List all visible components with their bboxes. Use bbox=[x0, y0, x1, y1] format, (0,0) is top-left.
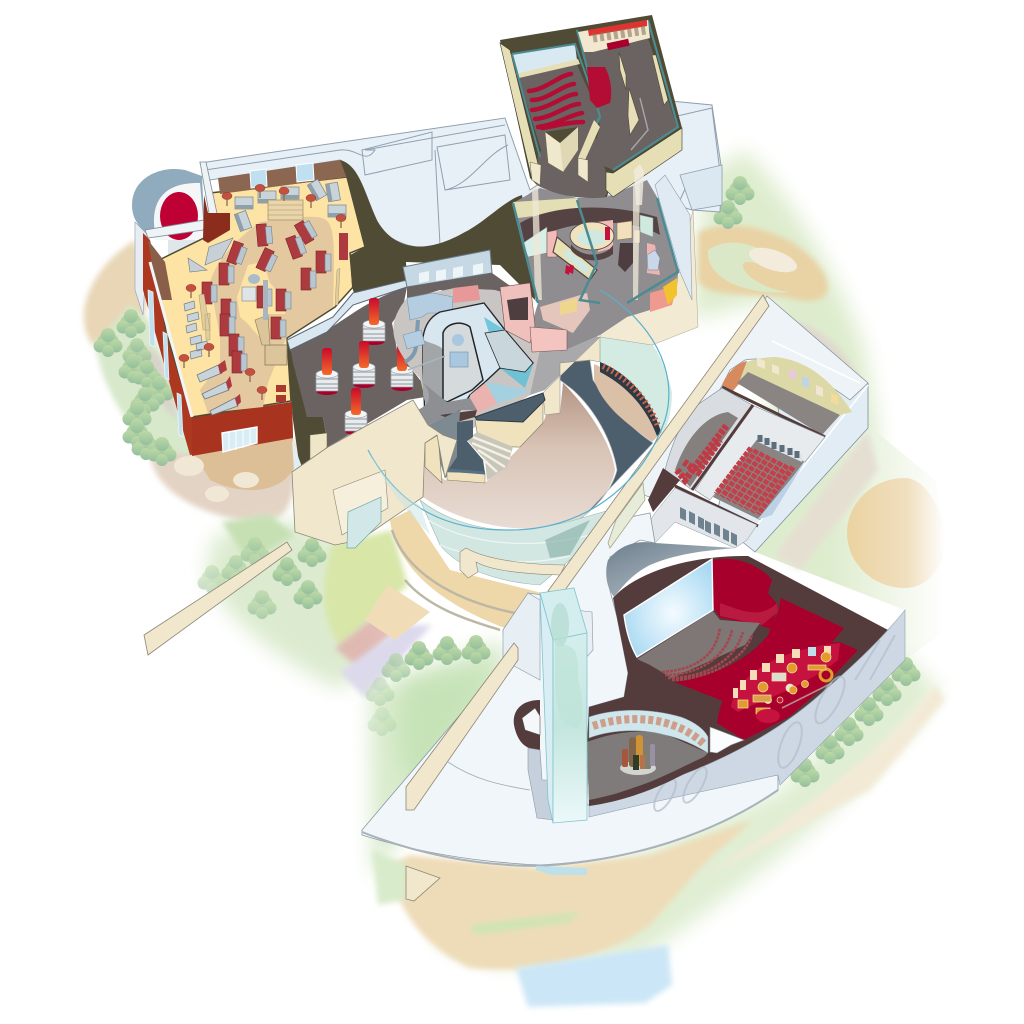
floor slab bbox=[500, 15, 682, 198]
beige outer wall bbox=[600, 210, 698, 345]
right theatres bbox=[625, 296, 868, 552]
support column bbox=[406, 866, 440, 901]
dark curved lobby niche bbox=[514, 700, 540, 750]
left side windows bbox=[148, 290, 183, 437]
glass perimeter wall bbox=[589, 610, 905, 817]
atrium slate walkway bbox=[560, 360, 653, 523]
curved rooms bbox=[523, 227, 547, 257]
front walls bbox=[606, 128, 682, 197]
wall of portraits bbox=[594, 362, 662, 442]
room one bbox=[665, 388, 752, 490]
olive structural slab bbox=[340, 160, 538, 303]
lipstick displays bbox=[316, 298, 413, 435]
left hall floor bbox=[155, 177, 365, 417]
light shafts bbox=[532, 170, 640, 300]
beige column bbox=[543, 337, 600, 415]
bottle display bbox=[620, 735, 656, 775]
white block bbox=[710, 727, 744, 753]
roof: pale rear roof slab bbox=[200, 100, 722, 248]
central hall: machine room bbox=[393, 273, 600, 478]
terraces bbox=[365, 510, 550, 640]
rotunda with red disc bbox=[132, 169, 208, 315]
room B bbox=[583, 38, 677, 170]
front panel wall bbox=[640, 488, 757, 548]
right roof bbox=[715, 340, 868, 552]
gallery floor bbox=[587, 732, 708, 803]
left hall: yellow gallery bbox=[143, 160, 365, 456]
low boundary wall bbox=[144, 542, 292, 655]
room two bbox=[695, 405, 825, 500]
exhibit objects bbox=[738, 652, 832, 714]
screen bbox=[624, 559, 713, 657]
exhibit red bay bbox=[717, 642, 858, 740]
white frame walls bbox=[145, 162, 218, 238]
dark arc bbox=[520, 207, 660, 245]
staircase balcony bbox=[425, 337, 600, 483]
glass tower bbox=[540, 588, 587, 823]
canopy bbox=[460, 548, 565, 578]
white plaza roof bbox=[362, 513, 778, 865]
curved exhibit wall bbox=[731, 643, 840, 712]
glass atrium lower body bbox=[420, 500, 610, 585]
seating and tables bbox=[179, 179, 348, 415]
beige band bbox=[513, 198, 582, 218]
glass side slot bbox=[655, 175, 692, 300]
bottle gallery bbox=[514, 700, 744, 820]
rear brown wall bbox=[218, 160, 347, 194]
top suspended cinema room bbox=[500, 15, 682, 205]
red seating rows bbox=[529, 74, 583, 128]
cinema dark floor bbox=[587, 556, 888, 803]
gallery arch wall bbox=[722, 357, 852, 415]
glass atrium rear pane bbox=[600, 295, 672, 438]
upper exhibition floor bbox=[500, 170, 698, 352]
trees bbox=[94, 176, 920, 787]
carpet path bbox=[200, 217, 334, 413]
teal outlines bbox=[513, 198, 678, 303]
lower wall bar bbox=[406, 643, 518, 810]
glass atrium rim and frame bbox=[368, 290, 669, 548]
curved mural bbox=[589, 710, 708, 753]
atrium floor bbox=[423, 383, 615, 529]
lobby floor bbox=[290, 287, 437, 447]
glass band bbox=[287, 280, 407, 350]
red tier one bbox=[713, 559, 778, 630]
left hall brick walls bbox=[143, 233, 293, 455]
grounds: landscape washes bbox=[84, 150, 960, 1007]
grey floor plate bbox=[513, 180, 678, 350]
grand cinema bbox=[587, 556, 888, 803]
room A bbox=[518, 60, 600, 155]
gallery floor bbox=[737, 372, 840, 435]
spine wall bbox=[548, 295, 769, 597]
pink rooms bbox=[500, 283, 535, 343]
slate foyer bbox=[606, 542, 735, 597]
auditorium floor bbox=[637, 611, 760, 678]
red tier two bbox=[674, 598, 844, 703]
lipstick lobby bbox=[287, 250, 492, 470]
front windows bbox=[222, 427, 257, 452]
lower-left olive slab bbox=[287, 340, 328, 470]
entrance wall and glazed box bbox=[292, 400, 457, 548]
plaza stone block bbox=[503, 593, 593, 680]
